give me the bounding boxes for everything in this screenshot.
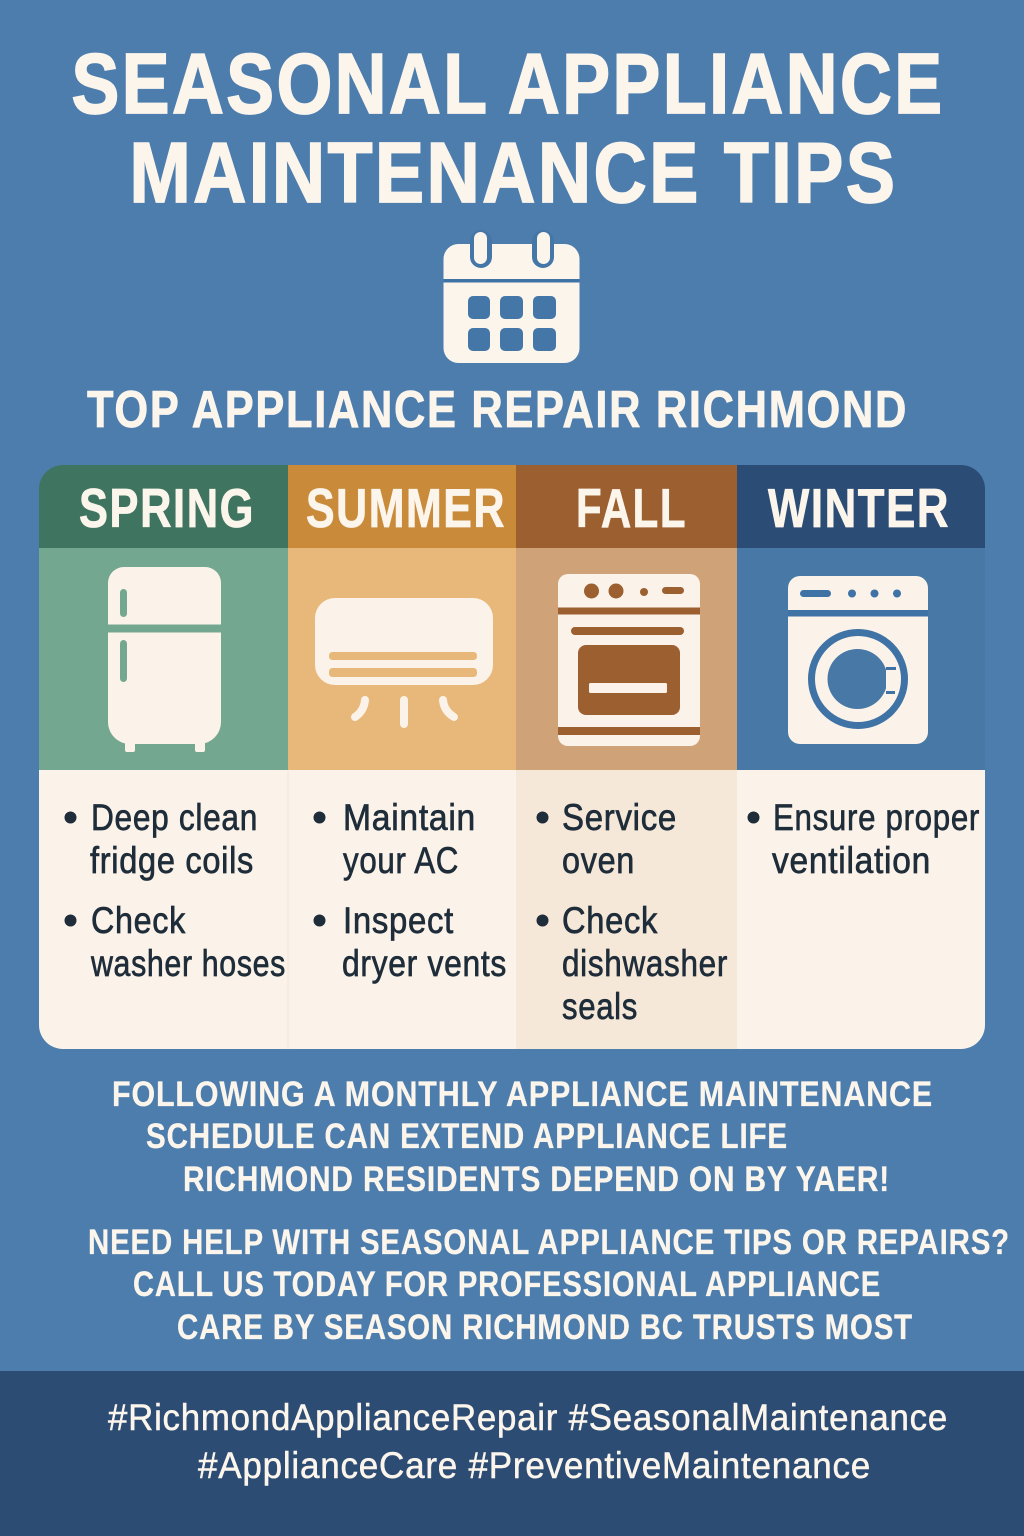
summer tips (314, 797, 507, 984)
paragraph: maintenance schedule (112, 1075, 933, 1199)
icon: washing machine (788, 576, 928, 744)
panel: winter (737, 465, 985, 1049)
fall tips: Service (562, 797, 677, 838)
fall tips: Check (562, 900, 658, 941)
spring tips: Check (91, 900, 186, 941)
footer band with hashtags (0, 1371, 1024, 1536)
paragraph: maintenance schedule: SCHEDULE CAN EXTEND APPLIANCE LIFE (146, 1117, 788, 1156)
footer band with hashtags: #ApplianceCare #PreventiveMaintenance (198, 1445, 871, 1486)
icon: oven (558, 574, 700, 746)
summer tips: your AC (343, 840, 459, 881)
spring tips: Deep clean (91, 797, 258, 838)
panel: winter: WINTER (768, 477, 950, 539)
winter tips: Ensure proper (773, 797, 980, 838)
icon: calendar (444, 230, 580, 363)
summer tips: dryer vents (342, 943, 507, 984)
panel: fall (516, 465, 738, 1049)
panel: summer (288, 465, 517, 1049)
panel: summer: SUMMER (306, 477, 506, 539)
fall tips: seals (562, 986, 638, 1027)
title: MAINTENANCE TIPS (130, 126, 898, 221)
winter tips: ventilation (772, 840, 931, 881)
footer band with hashtags: #RichmondApplianceRepair #SeasonalMaintenance (108, 1397, 948, 1438)
fall tips: oven (562, 840, 635, 881)
title (72, 37, 944, 221)
paragraph: call to action: CALL US TODAY FOR PROFESSIONAL APPLIANCE (133, 1265, 881, 1304)
summer tips: Inspect (343, 900, 454, 941)
paragraph: call to action (88, 1223, 1010, 1347)
summer tips: Maintain (343, 797, 476, 838)
spring tips: fridge coils (90, 840, 254, 881)
panel: fall: FALL (576, 477, 687, 539)
winter tips (748, 797, 980, 881)
spring tips: washer hoses (90, 943, 286, 984)
seasonal table (39, 465, 985, 1049)
panel: spring: SPRING (79, 477, 255, 539)
paragraph: maintenance schedule: RICHMOND RESIDENTS DEPEND ON BY YAER! (183, 1160, 890, 1199)
fall tips: dishwasher (562, 943, 728, 984)
fall tips (536, 797, 728, 1027)
panel: spring (39, 465, 288, 1049)
spring tips (64, 797, 286, 984)
icon: air conditioner (315, 598, 493, 724)
icon: refrigerator (108, 567, 221, 752)
